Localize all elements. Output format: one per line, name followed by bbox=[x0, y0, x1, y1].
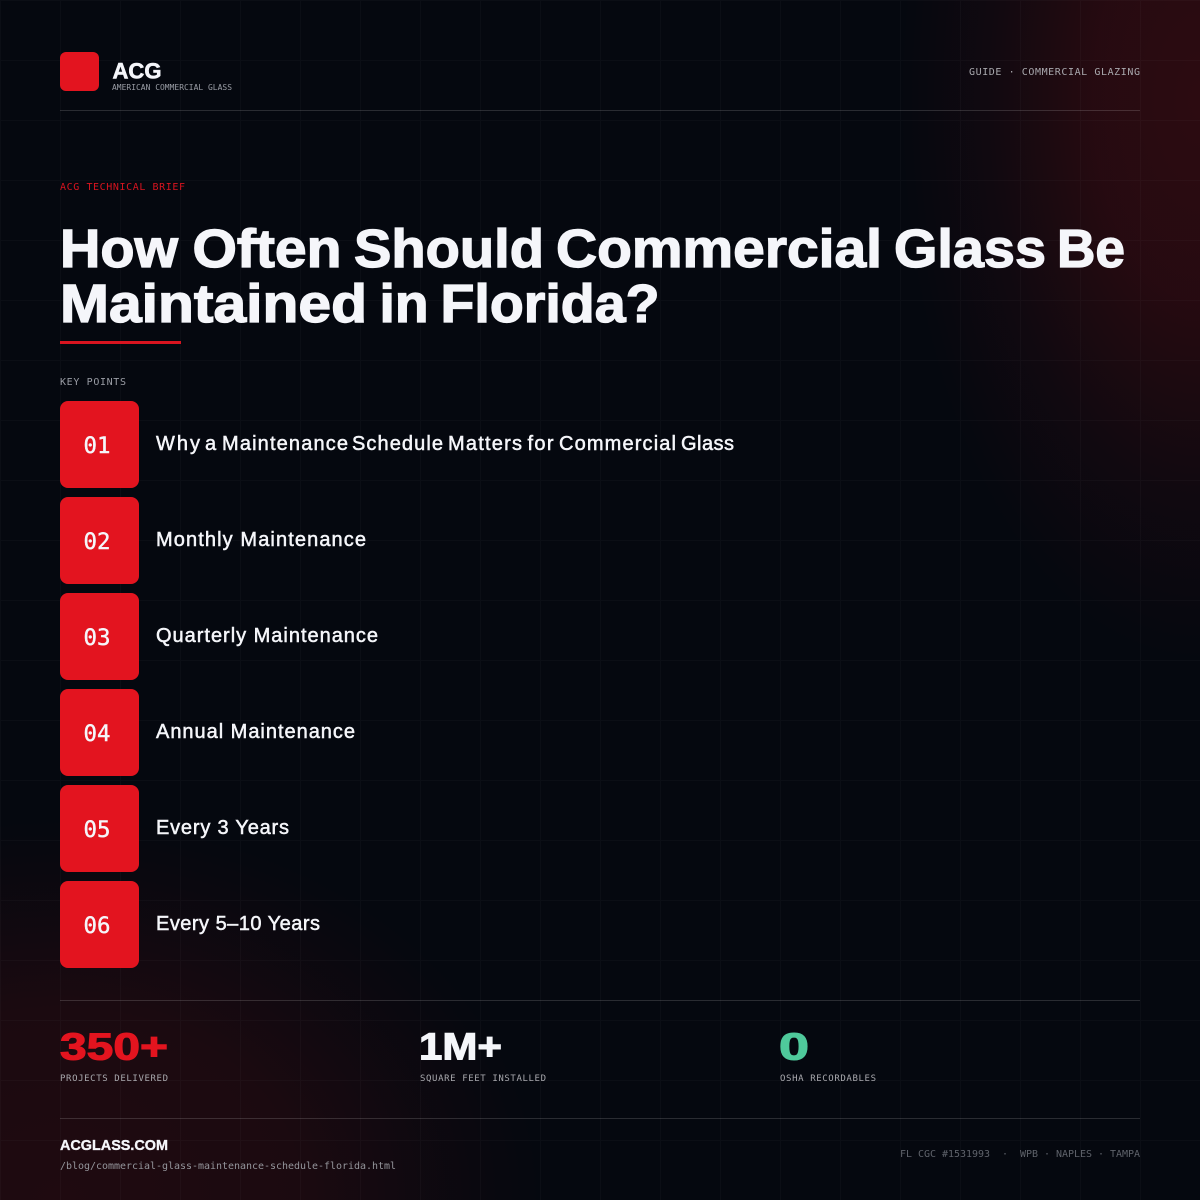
title: Should bbox=[354, 220, 544, 279]
title: Often bbox=[192, 220, 342, 279]
eyebrow: ACG TECHNICAL BRIEF bbox=[60, 182, 185, 193]
stat: projects delivered: PROJECTS DELIVERED bbox=[60, 1074, 168, 1084]
item 06: 06 bbox=[84, 914, 110, 939]
key points list bbox=[60, 401, 734, 968]
item 01: for bbox=[528, 433, 554, 455]
header: brand bbox=[60, 52, 232, 92]
title: in bbox=[380, 275, 428, 334]
key points heading: KEY POINTS bbox=[60, 377, 126, 388]
title: Florida? bbox=[440, 275, 660, 334]
item 01: 01 bbox=[84, 434, 110, 459]
item 03 bbox=[60, 593, 378, 680]
item 02: Monthly Maintenance bbox=[156, 529, 366, 551]
brand tagline: AMERICAN COMMERCIAL GLASS bbox=[112, 83, 232, 92]
stat: square feet installed bbox=[419, 1026, 546, 1084]
stat: osha recordables bbox=[779, 1026, 876, 1084]
title bbox=[60, 220, 1125, 334]
icon: logo square bbox=[60, 52, 99, 91]
brand name: ACG bbox=[112, 58, 162, 83]
item 01: Maintenance bbox=[222, 433, 348, 455]
item 02 bbox=[60, 497, 366, 584]
stat: projects delivered bbox=[60, 1026, 168, 1084]
title: Be bbox=[1057, 220, 1125, 279]
item 01: Matters bbox=[448, 433, 522, 455]
item 01: a bbox=[205, 433, 217, 455]
item 02: 02 bbox=[84, 530, 110, 555]
title: Glass bbox=[894, 220, 1046, 279]
title: Maintained bbox=[60, 275, 367, 334]
stat: projects delivered: 350+ bbox=[60, 1026, 168, 1068]
item 05: 05 bbox=[84, 818, 110, 843]
item 06: Every 5–10 Years bbox=[156, 913, 320, 935]
item 01: Commercial bbox=[559, 433, 676, 455]
item 06 bbox=[60, 881, 320, 968]
item 01: Why bbox=[156, 433, 200, 455]
item 04: 04 bbox=[84, 722, 110, 747]
stat: osha recordables: 0 bbox=[779, 1026, 809, 1068]
footer: site: /blog/commercial-glass-maintenance-schedule-florida.html bbox=[60, 1161, 396, 1172]
item 03: Quarterly Maintenance bbox=[156, 625, 378, 647]
item 01: Glass bbox=[681, 433, 734, 455]
footer: license and locations: FL CGC #1531993 · WPB · NAPLES · TAMPA bbox=[900, 1149, 1140, 1160]
header: category label: GUIDE · COMMERCIAL GLAZING bbox=[969, 67, 1140, 78]
item 01 bbox=[60, 401, 734, 488]
footer: site: ACGLASS.COM bbox=[60, 1137, 168, 1154]
item 04: Annual Maintenance bbox=[156, 721, 355, 743]
item 05 bbox=[60, 785, 289, 872]
footer: site bbox=[60, 1137, 396, 1172]
stat: square feet installed: SQUARE FEET INSTALLED bbox=[420, 1074, 546, 1084]
item 04 bbox=[60, 689, 355, 776]
item 05: Every 3 Years bbox=[156, 817, 289, 839]
title: How bbox=[60, 220, 178, 279]
item 03: 03 bbox=[84, 626, 110, 651]
stat: square feet installed: 1M+ bbox=[419, 1026, 502, 1068]
title: Commercial bbox=[556, 220, 882, 279]
stat: osha recordables: OSHA RECORDABLES bbox=[780, 1074, 876, 1084]
item 01: Schedule bbox=[352, 433, 443, 455]
title underline bbox=[60, 341, 181, 344]
